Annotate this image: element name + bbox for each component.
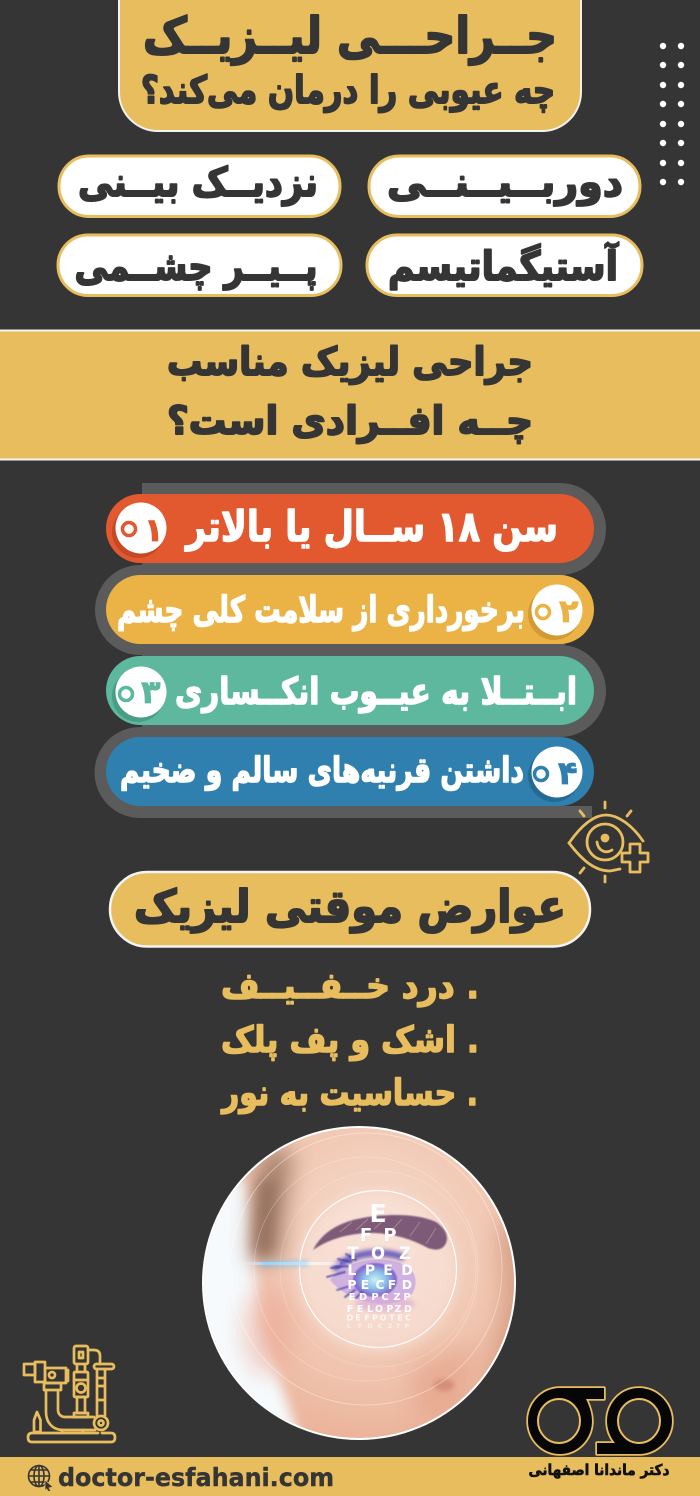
icon: globe with cursor [28, 1466, 53, 1492]
eye chart letters: PECFD [347, 1277, 412, 1292]
text block: side effects [220, 966, 479, 1114]
eye chart letters: FP [360, 1225, 397, 1246]
footer bar [0, 1457, 700, 1496]
pill: hyperopia [369, 156, 640, 216]
panel: criteria list [95, 483, 606, 818]
panel: suitable candidates band [0, 330, 700, 460]
website address: doctor-esfahani.com [58, 1463, 334, 1492]
item 1: سن ۱۸ ســال یا بالاتر [184, 502, 558, 552]
pill: presbyopia: پــیــر چشــمی [74, 244, 318, 290]
illustration: eye exam photo [190, 1125, 530, 1445]
text block: side effects: . اشک و پف پلک [221, 1020, 479, 1061]
eye [330, 1259, 416, 1304]
item 1: ۰۱ [119, 511, 164, 549]
band line 2: چــه افــرادی است؟ [167, 399, 533, 444]
item 4: ۰۴ [531, 754, 578, 792]
item 2: برخورداری از سلامت کلی چشم [117, 590, 525, 631]
item 3: ابــتــلا به عیــوب انکــساری [175, 670, 577, 713]
title line 2: چه عیوبی را درمان می‌کند؟ [141, 68, 555, 112]
panel: temporary side effects heading [110, 872, 590, 946]
panel: title [119, 0, 581, 131]
item 3: ۰۳ [116, 673, 161, 711]
dot pattern [660, 43, 684, 185]
pill: hyperopia: دوربــیــنــی [387, 160, 623, 206]
logo caption: دکتر ماندانا اصفهانی [528, 1461, 670, 1479]
pill: astigmatism: آستیگماتیسم [388, 241, 619, 290]
eye chart letters: FELOPZD [347, 1304, 412, 1315]
item 2: ۰۲ [533, 592, 579, 630]
item 3 [106, 656, 594, 725]
item 2 [106, 575, 594, 644]
pill: myopia [59, 156, 340, 216]
eye chart letters: DEFPOTEC [347, 1314, 411, 1322]
text block: side effects: . درد خــفــیــف [221, 966, 479, 1007]
band line 1: جراحی لیزیک مناسب [167, 340, 533, 385]
item 4 [106, 737, 594, 806]
laser beam [240, 1262, 340, 1265]
rings [230, 1133, 502, 1405]
eye chart letters: EDPCZP [349, 1292, 411, 1303]
eye chart letters [347, 1199, 413, 1330]
panel: temporary side effects heading: عوارض موقتی لیزیک [134, 880, 566, 933]
logo: Dr. Mandana Esfahani mark [528, 1388, 672, 1454]
item 4: داشتن قرنیه‌های سالم و ضخیم [120, 751, 524, 791]
icon: slit lamp instrument [24, 1346, 115, 1442]
icon: eye with plus [569, 802, 648, 882]
pill: myopia: نزدیــک بیــنی [78, 160, 318, 206]
item 1 [106, 494, 594, 563]
eye chart letters: LPED [348, 1263, 413, 1279]
eyebrow [313, 1215, 447, 1250]
eye chart letters: E [369, 1199, 387, 1228]
eye chart letters: TOZ [347, 1244, 411, 1263]
eye chart letters: LFDCZTP [347, 1322, 410, 1330]
text block: side effects: . حساسیت به نور [220, 1073, 478, 1114]
title line 1: جــراحـــی لیــزیــک [143, 7, 557, 66]
pill: presbyopia [58, 235, 341, 296]
